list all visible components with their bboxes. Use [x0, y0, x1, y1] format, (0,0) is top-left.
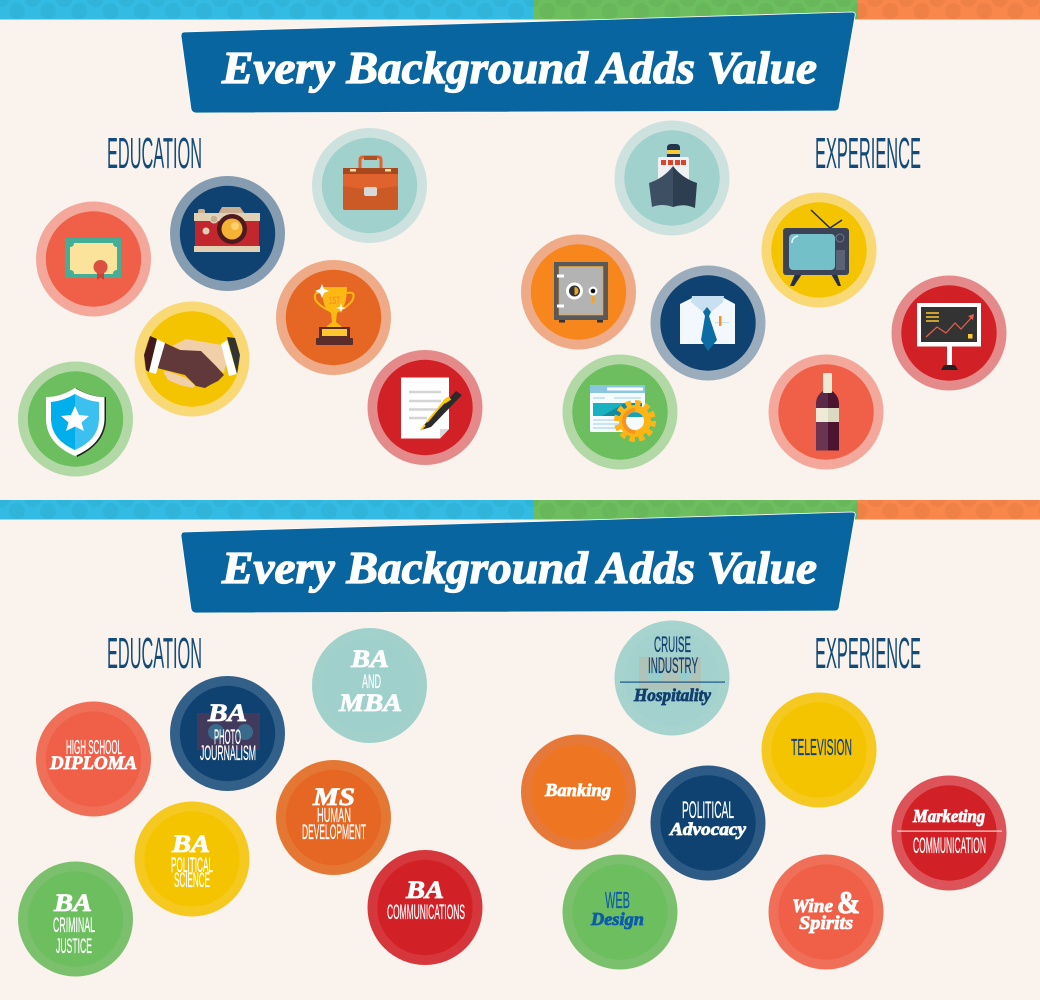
- badge: television: [762, 192, 876, 308]
- badge: wine and spirits: &: [837, 884, 860, 920]
- badge: television: TELEVISION: [791, 734, 852, 760]
- badge: BA photo journalism: JOURNALISM: [200, 742, 256, 765]
- badge: cruise ship: [614, 120, 730, 236]
- badge: web design: [562, 854, 678, 970]
- badge: BA political science: SCIENCE: [174, 869, 210, 892]
- title banner: [181, 12, 855, 113]
- badge: political advocacy: Advocacy: [669, 819, 747, 839]
- badge: BA and MBA: [312, 628, 427, 743]
- badge: BA criminal justice: BA: [53, 890, 92, 917]
- badge: banking: [521, 734, 636, 850]
- badge: BA criminal justice: CRIMINAL: [53, 914, 95, 937]
- lower title banner: Every Background Adds Value: [221, 542, 817, 593]
- badge: high school diploma: DIPLOMA: [49, 753, 137, 774]
- badge: shield: [18, 362, 133, 476]
- badge: document and pen: [368, 350, 482, 465]
- badge: high school diploma: HIGH SCHOOL: [66, 736, 122, 759]
- badge: BA criminal justice: JUSTICE: [56, 935, 92, 958]
- badge: web design: WEB: [605, 887, 630, 913]
- lower title banner: [181, 512, 855, 613]
- panel: icon version: EDUCATION: [107, 129, 202, 178]
- badge: high school diploma: [36, 702, 151, 816]
- badge: political advocacy: POLITICAL: [682, 797, 734, 824]
- badge: wine bottle: [768, 354, 884, 470]
- badge: banking: Banking: [544, 780, 611, 800]
- badge: BA political science: [134, 802, 250, 916]
- badge: trophy: [276, 260, 391, 375]
- panel: text version: [0, 500, 1040, 976]
- badge: safe: [521, 234, 636, 350]
- badge: cruise industry hospitality: CRUISE: [654, 632, 691, 657]
- badge: BA photo journalism: PHOTO: [214, 726, 241, 749]
- badge: handshake: [134, 302, 250, 416]
- badge: MS human development: HUMAN: [317, 805, 351, 827]
- badge: wine and spirits: Spirits: [799, 913, 853, 934]
- panel: text version: COMMUNICATIONS: [387, 901, 465, 924]
- badge: trophy: 1ST: [329, 295, 340, 307]
- badge: BA criminal justice: [18, 862, 133, 976]
- badge: cruise industry hospitality: INDUSTRY: [648, 653, 698, 678]
- badge: television: [762, 692, 876, 808]
- badge: BA communications: BA: [405, 877, 444, 904]
- lower colour band: [0, 500, 1040, 520]
- badge: BA and MBA: BA: [350, 646, 389, 673]
- badge: MS human development: [276, 760, 391, 875]
- badge: presentation chart: [892, 276, 1006, 390]
- badge: BA communications: [368, 850, 482, 965]
- badge: briefcase: [312, 128, 427, 243]
- badge: website and gear: [562, 354, 678, 470]
- badge: shirt and tie: [650, 266, 766, 380]
- badge: BA photo journalism: BA: [207, 700, 247, 727]
- panel: text version: EDUCATION: [107, 629, 202, 678]
- badge: BA political science: POLITICAL: [171, 854, 213, 877]
- badge: web design: Design: [590, 909, 644, 929]
- badge: MS human development: MS: [312, 784, 355, 811]
- badge: BA political science: BA: [171, 831, 210, 858]
- badge: camera: [170, 176, 285, 291]
- badge: BA photo journalism: [170, 676, 285, 791]
- badge: BA and MBA: AND: [362, 672, 381, 693]
- badge: MS human development: DEVELOPMENT: [302, 821, 366, 844]
- badge: political advocacy: [650, 766, 766, 880]
- title banner: Every Background Adds Value: [221, 42, 817, 93]
- badge: cruise industry hospitality: [614, 620, 730, 736]
- badge: wine and spirits: Wine: [792, 896, 834, 917]
- badge: marketing communication: Marketing: [912, 806, 985, 826]
- badge: BA and MBA: MBA: [338, 690, 402, 717]
- badge: cruise industry hospitality: Hospitality: [633, 685, 712, 705]
- badge: diploma certificate: [36, 202, 151, 316]
- badge: marketing communication: [892, 776, 1006, 890]
- top colour band: [0, 0, 1040, 20]
- badge: wine and spirits: [768, 854, 884, 970]
- panel: icon version: [0, 0, 1040, 476]
